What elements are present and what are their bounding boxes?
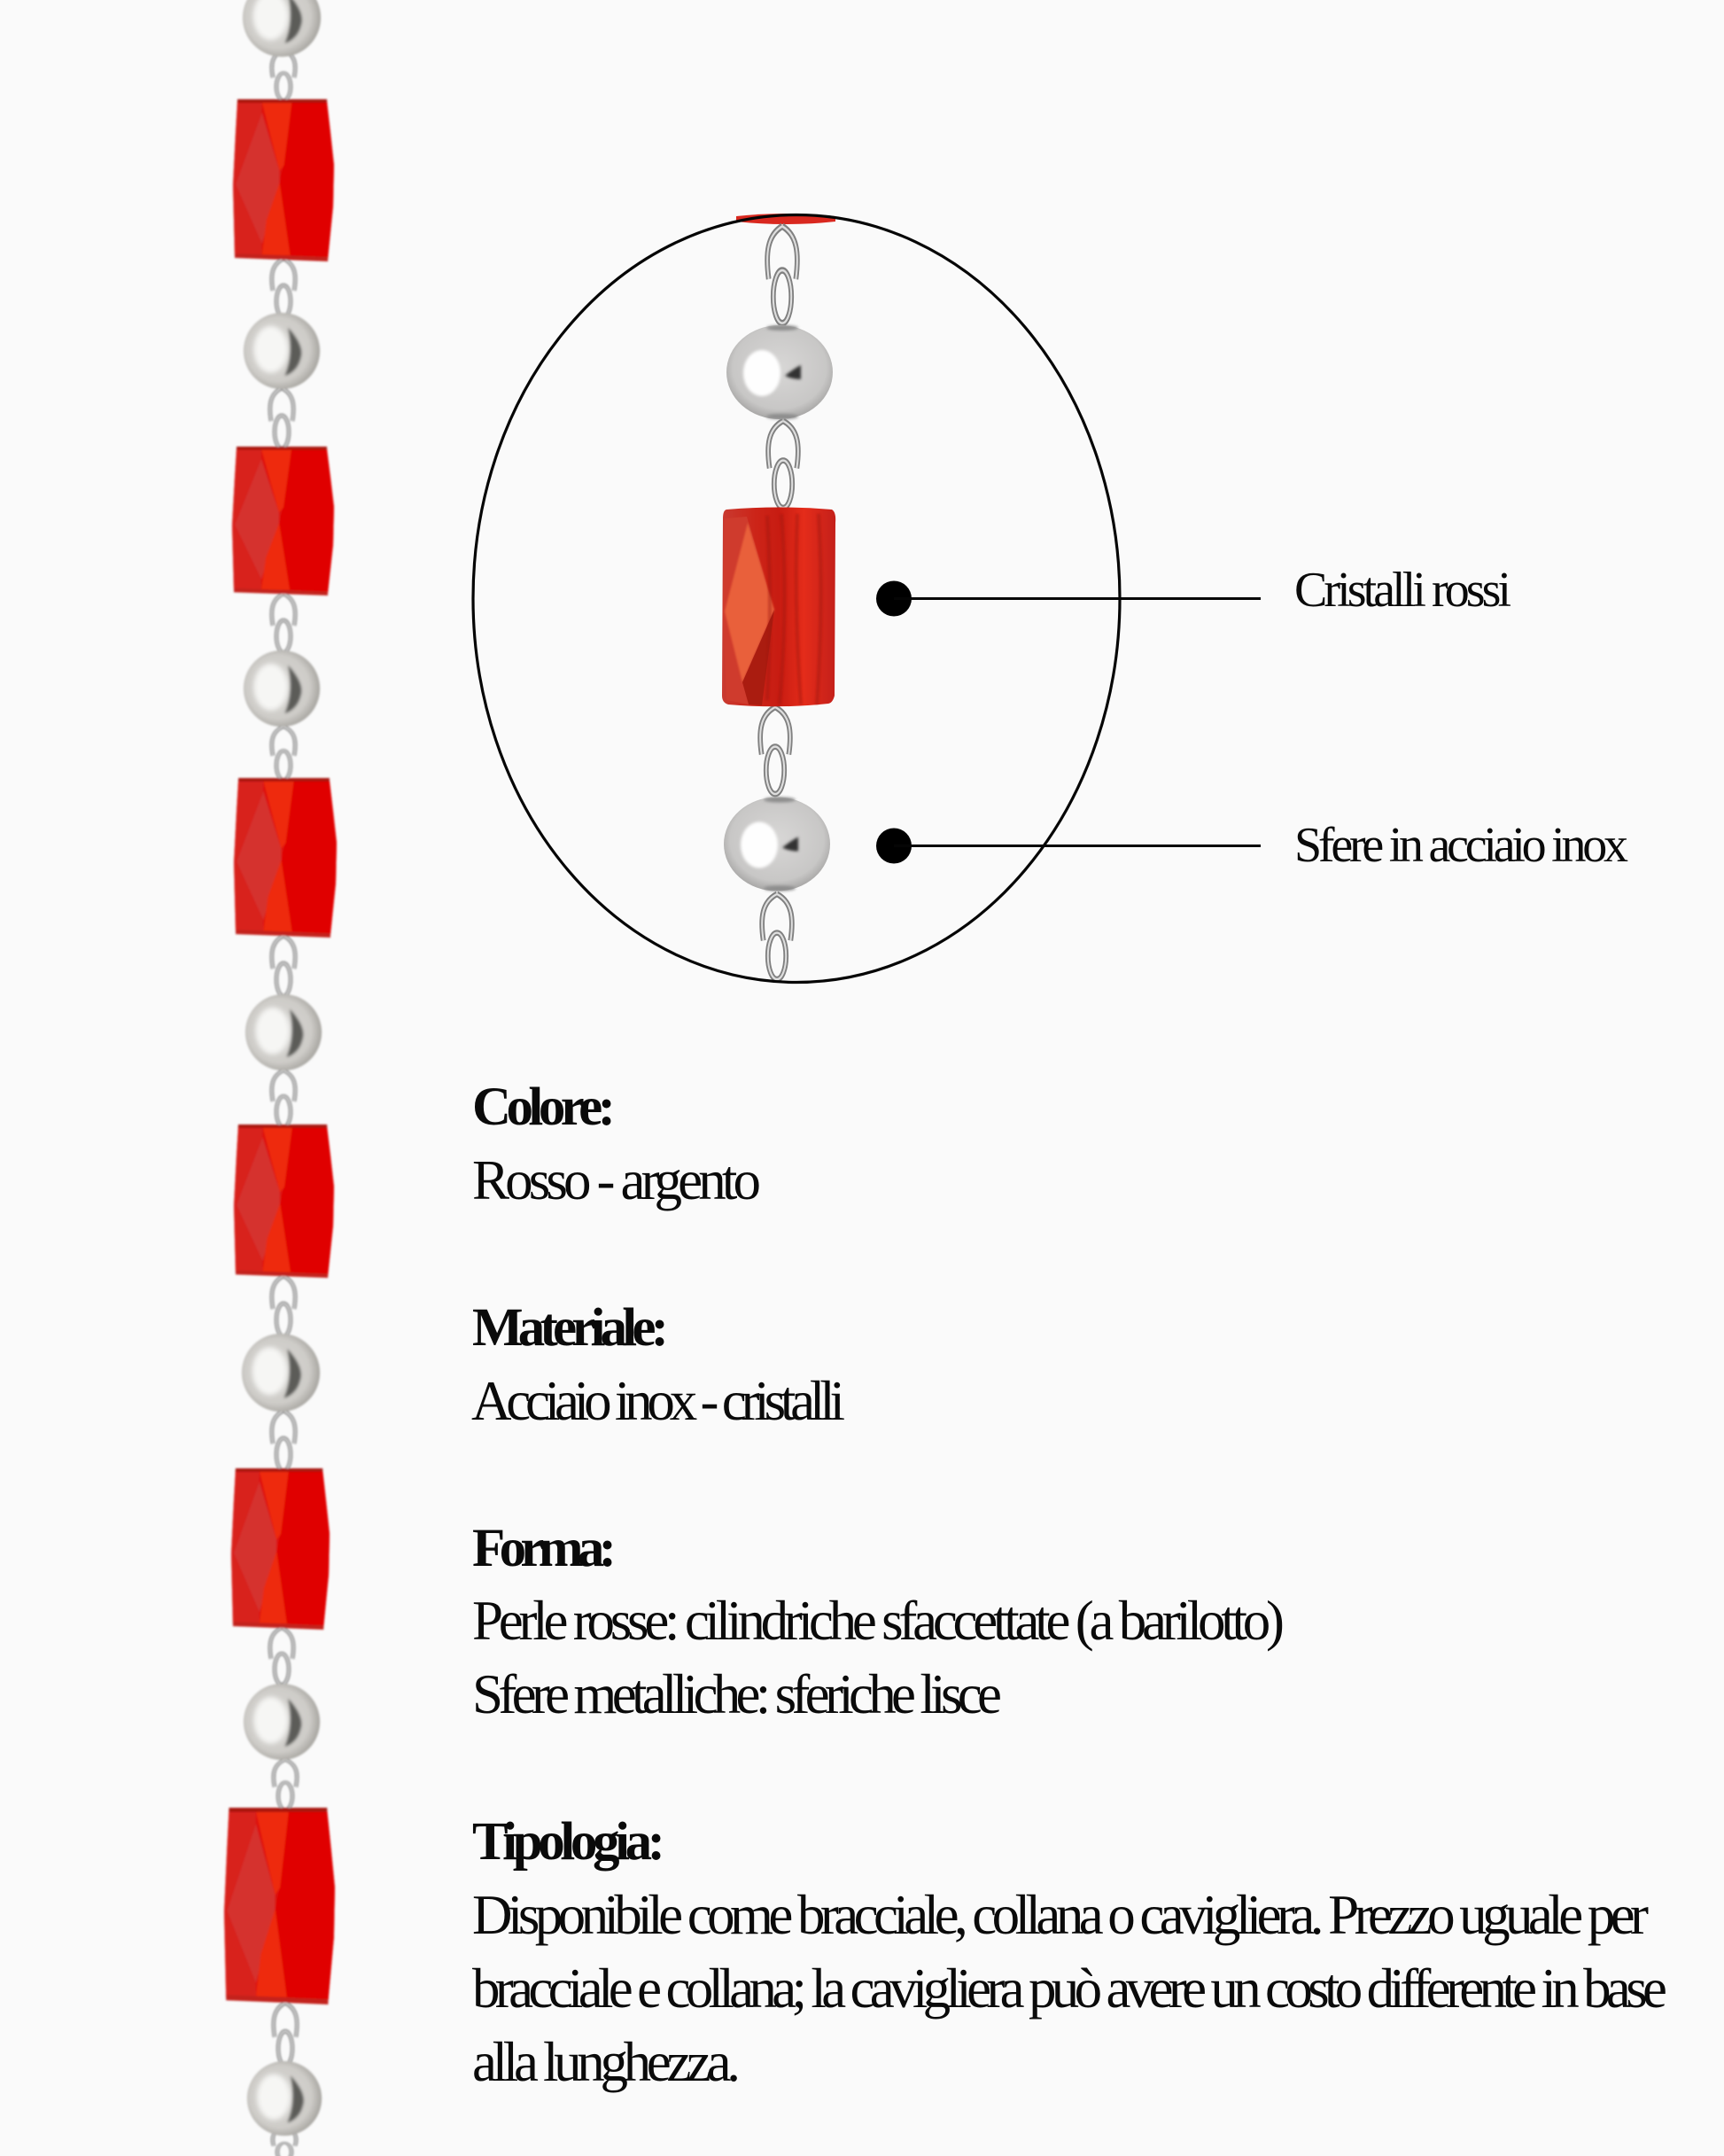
- steel spheres: [242, 0, 322, 2136]
- pointer dot: [876, 828, 912, 863]
- label: Sfere in acciaio inox: [1294, 818, 1628, 873]
- value line 1: Perle rosse: cilindriche sfaccettate (a barilotto): [472, 1590, 1285, 1652]
- heading: Forma:: [472, 1519, 617, 1578]
- leader line: [894, 597, 1261, 600]
- label: Cristalli rossi: [1294, 563, 1511, 618]
- value: Rosso - argento: [472, 1149, 761, 1211]
- pointer dot: [876, 581, 912, 617]
- value line 2: bracciale e collana; la cavigliera può avere un costo differente in base: [472, 1958, 1667, 2020]
- heading: Colore:: [472, 1078, 616, 1137]
- bracelet chain photo: [224, 0, 337, 2156]
- magnified red bead: [722, 507, 835, 706]
- leader line: [894, 844, 1261, 847]
- value line 3: alla lunghezza.: [472, 2031, 741, 2093]
- magnified links: [760, 226, 798, 979]
- magnified steel sphere upper: [726, 325, 833, 419]
- magnified detail: [473, 214, 1120, 982]
- heading: Materiale:: [472, 1298, 669, 1358]
- spec: type: [472, 1812, 1667, 2093]
- value: Acciaio inox - cristalli: [471, 1370, 845, 1432]
- circle outline: [473, 214, 1120, 982]
- spec: shape: [472, 1519, 1285, 1725]
- magnified steel sphere lower: [724, 798, 830, 891]
- callout: crystals: [876, 563, 1511, 618]
- magnified top bead sliver: [736, 214, 835, 224]
- chain links: [270, 51, 297, 2156]
- value line 2: Sfere metalliche: sferiche lisce: [472, 1663, 1002, 1725]
- spec: material: [471, 1298, 845, 1432]
- callout: steel spheres: [876, 818, 1628, 873]
- red faceted beads: [224, 99, 337, 2004]
- spec: colour: [472, 1078, 761, 1211]
- heading: Tipologia:: [472, 1812, 665, 1872]
- value line 1: Disponibile come bracciale, collana o cavigliera. Prezzo uguale per: [472, 1884, 1649, 1946]
